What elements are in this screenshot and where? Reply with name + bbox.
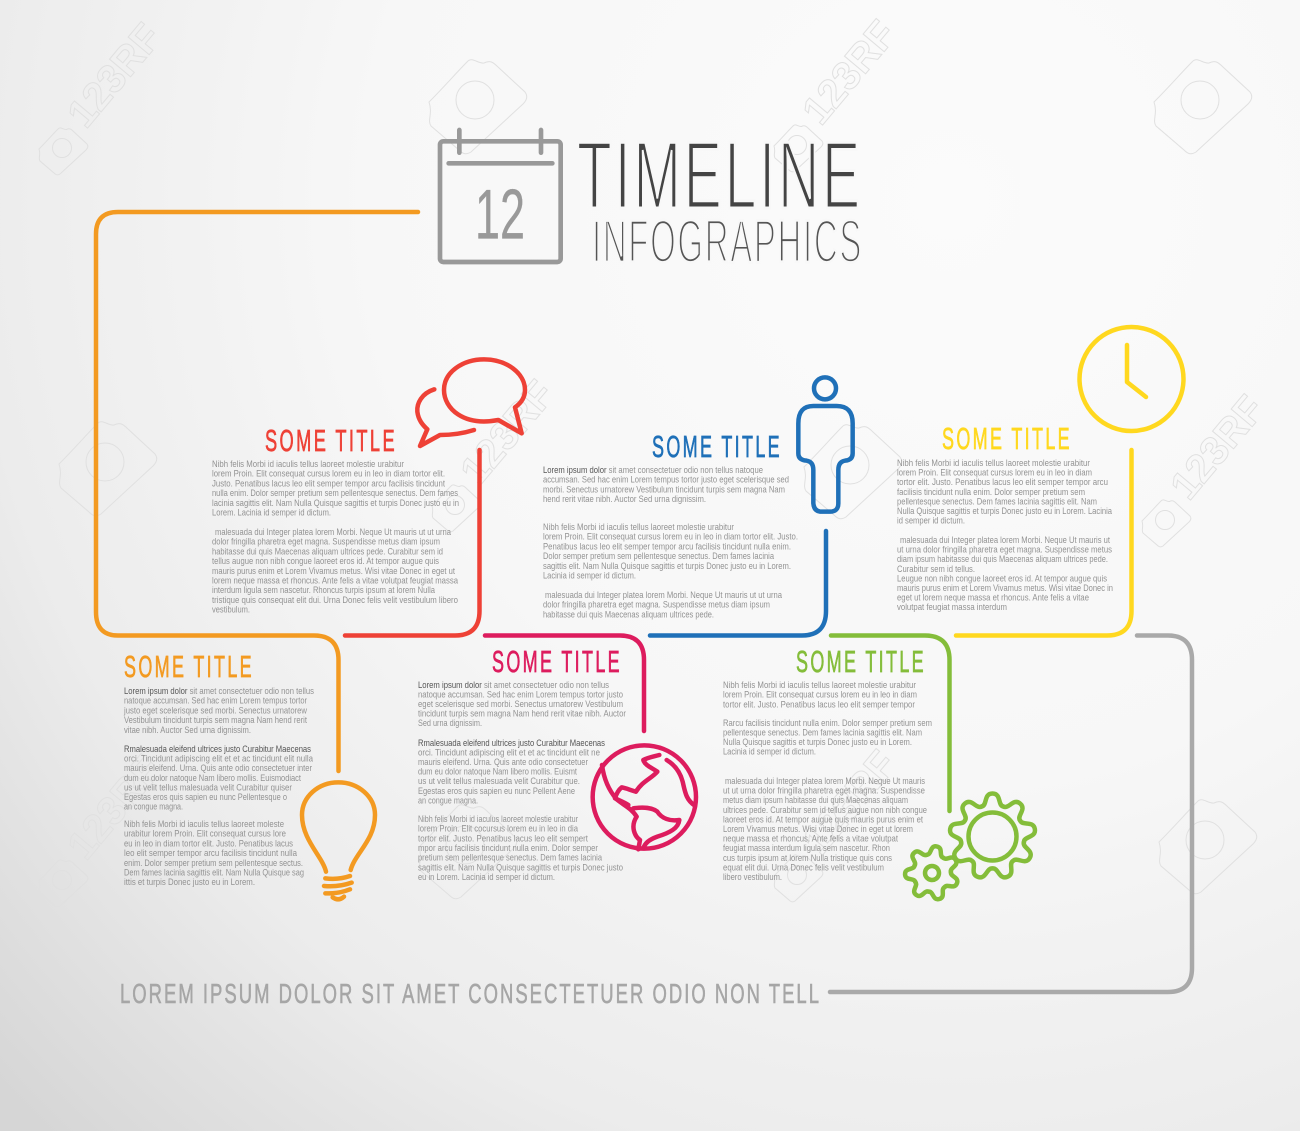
- text block: malesuada dui Integer platea lorem Morbi. Neque Ut mauris ut ut urna: [545, 590, 782, 600]
- watermarks: 123RF: [452, 373, 563, 493]
- text block: vitae nibh. Auctor Sed urna dignissim.: [124, 725, 251, 735]
- connector line: [831, 636, 950, 811]
- connector line: [485, 636, 644, 731]
- watermarks: 123RF: [59, 748, 170, 868]
- text block: tincidunt turpis sem magna Nam hend rerit vitae nibh. Auctor: [418, 708, 626, 718]
- text block: lacinia sagittis elit. Nam Nulla Quisque sagittis et turpis Donec justo eu in: [212, 498, 459, 508]
- text block: ultrices pede. Curabitur sem id tellus augue non nibh congue: [723, 805, 927, 815]
- text block: mpor arcu facilisis tincidunt nulla enim. Dolor semper: [418, 843, 598, 853]
- text block: us ut velit tellus malesuada velit Curabitur que.: [418, 776, 580, 786]
- title: timeline: TIMELINE: [577, 122, 863, 229]
- text block: tortor elit. Justo. Penatibus lacus leo elit sempert: [418, 833, 588, 843]
- text block: Lorem. Lacinia id semper id dictum.: [212, 508, 331, 518]
- heading: SOME TITLE: [652, 430, 782, 464]
- text block: mauris purus enim et Lorem Vivamus metus. Wisi vitae Donec in eget ut: [212, 566, 455, 576]
- text block: Nibh felis Morbi id iaculis tellus laoreet molestie urabitur: [723, 680, 916, 690]
- text block: Nibh felis Morbi id iaculis tellus laoreet molestie urabitur: [897, 458, 1090, 468]
- text block: Sed urna dignissim.: [418, 718, 482, 728]
- text block: an congue magna.: [418, 795, 478, 805]
- watermarks: 123RF: [794, 743, 905, 863]
- text block: Lacinia id semper id dictum.: [723, 747, 816, 757]
- text block: eu in Lorem. Lacinia id semper id dictum.: [418, 872, 555, 882]
- text block: id semper id dictum.: [897, 516, 965, 526]
- footer: gray connector line: [830, 636, 1192, 992]
- text block: Egestas eros quis sapien eu nunc Pellent Aene: [418, 786, 575, 796]
- connector line: [345, 450, 480, 636]
- text block: Lacinia id semper id dictum.: [543, 570, 636, 580]
- text block: nulla enim. Dolor semper pretium sem pellentesque senectus. Dem fames: [212, 488, 458, 498]
- text block: orci. Tincidunt adipiscing elit et et ac tincidunt elit nulla: [124, 754, 313, 764]
- text block: accumsan. Sed hac enim Lorem tempus tortor justo eget scelerisque sed: [543, 475, 789, 485]
- text block: pretium sem pellentesque senectus. Dem fames lacinia: [418, 853, 602, 863]
- text block: Justo. Penatibus lacus leo elit semper tempor arcu facilisis tincidunt: [212, 478, 445, 488]
- text block: vestibulum.: [212, 605, 250, 615]
- icon: clock: [1080, 327, 1184, 431]
- text block: feugiat massa interdum ligula sem nascetur. Rhon: [723, 843, 890, 853]
- connector line: [96, 212, 418, 771]
- text block: habitasse dui quis Maecenas aliquam ultrices pede. Curabitur sem id: [212, 546, 443, 556]
- heading: SOME TITLE: [492, 645, 622, 679]
- watermarks: [39, 13, 1273, 907]
- text block: Penatibus lacus leo elit semper tempor arcu facilisis tincidunt nulla enim.: [543, 541, 791, 551]
- text block: Egestas eros quis sapien eu nunc Pellentesque o: [124, 792, 287, 802]
- text block: morbi. Senectus urnatorew Vestibulum tincidunt turpis sem magna Nam: [543, 484, 785, 494]
- footer text: LOREM IPSUM DOLOR SIT AMET CONSECTETUER ODIO NON TELL: [120, 978, 821, 1009]
- text block: [723, 680, 932, 882]
- watermarks: 123RF: [1162, 388, 1273, 508]
- text block: cus turpis ipsum at lorem Nulla tristique quis cons: [723, 853, 892, 863]
- text block: mauris eleifend. Urna. Quis ante odio consectetuer inter: [124, 763, 312, 773]
- text block: eget ut lorem neque massa et rhoncus. Ante felis a vitae: [897, 593, 1089, 603]
- icon: calendar: 12: [475, 174, 525, 253]
- text block: Nulla Quisque sagittis et turpis Donec justo eu in Lorem.: [723, 737, 912, 747]
- heading: SOME TITLE: [124, 650, 254, 684]
- text block: interdum ligula sem nascetur. Rhoncus turpis ipsum at lorem Nulla: [212, 585, 435, 595]
- text block: tristique quis consequat elit dui. Urna Donec felis velit vestibulum libero: [212, 595, 458, 605]
- text block: equat elit dui. Urna Donec felis velit vestibulum: [723, 862, 884, 872]
- text block: volutpat feugiat massa interdum: [897, 602, 1007, 612]
- text block: Nibh felis Morbi id iaculis tellus laoreet moleste: [124, 819, 284, 829]
- text block: urabitur lorem Proin. Elit consequat cursus lore: [124, 829, 286, 839]
- panel: yellow step: [897, 327, 1184, 636]
- text block: Leugue non nibh congue laoreet eros id. At tempor augue quis: [897, 573, 1107, 583]
- text block: lorem Proin. Elit consequat cursus lorem eu in leo in diam: [897, 468, 1092, 478]
- text block: natoque accumsan. Sed hac enim Lorem tempus tortor: [124, 696, 307, 706]
- panel: red step: [212, 359, 525, 636]
- panel: orange step: [96, 212, 418, 899]
- text block: lorem Proin. Elit cocursus lorem eu in leo in dia: [418, 824, 578, 834]
- text block: ut urna dolor fringilla pharetra eget magna. Suspendisse metus: [897, 545, 1112, 555]
- text block: [897, 458, 1113, 612]
- text block: orci. Tincidunt adipiscing elit et et ac tincidunt elit ne: [418, 748, 600, 758]
- text block: tortor elit. Justo. Penatibus lacus leo elit semper tempor: [723, 699, 915, 709]
- text block: Rmalesuada eleifend ultrices justo Curabitur Maecenas: [418, 738, 605, 748]
- text block: lorem Proin. Elit consequat cursus lorem eu in leo in diam tortor elit.: [212, 469, 445, 479]
- text block: tortor elit. Justo. Penatibus lacus leo elit semper tempor arcu: [897, 477, 1108, 487]
- heading: SOME TITLE: [796, 645, 926, 679]
- text block: ut ut urna dolor fringilla pharetra eget magna. Suspendisse: [723, 786, 925, 796]
- text block: pellentesque senectus. Dem fames lacinia sagittis elit. Nam: [723, 728, 922, 738]
- text block: neque massa et rhoncus. Ante felis a vitae volutpat: [723, 834, 898, 844]
- text block: eu in leo in diam tortor elit. Justo. Penatibus lacus: [124, 838, 293, 848]
- text block: metus diam ipsum habitasse dui quis Maecenas aliquam: [723, 795, 908, 805]
- connector line: [956, 450, 1132, 636]
- text block: [543, 465, 798, 619]
- icon: speech bubbles: [417, 359, 525, 446]
- text block: Dem fames lacinia sagittis elit. Nam Nulla Quisque sag: [124, 868, 304, 878]
- text block: sagittis elit. Nam Nulla Quisque sagittis et turpis Donec justo eu in Lorem.: [543, 561, 791, 571]
- text block: mauris purus enim et Lorem Vivamus metus. Wisi vitae Donec in: [897, 583, 1113, 593]
- icon: person: [798, 377, 853, 512]
- text block: malesuada dui Integer platea lorem Morbi. Neque Ut mauris ut ut urna: [215, 527, 451, 537]
- text block: leo elit semper tempor arcu facilisis tincidunt nulla: [124, 848, 297, 858]
- text block: dolor fringilla pharetra eget magna. Suspendisse metus diam ipsum: [212, 537, 440, 547]
- text block: tellus augue non nibh congue laoreet eros id. At tempor augue quis: [212, 556, 439, 566]
- text block: libero vestibulum.: [723, 872, 782, 882]
- text block: eget scelerisque sed morbi. Senectus urnatorew Vestibulum: [418, 699, 623, 709]
- text block: Lorem ipsum dolor sit amet consectetuer odio non tellus: [418, 680, 609, 690]
- text block: enim. Dolor semper pretium sem pellentesque sectus.: [124, 858, 303, 868]
- watermarks: 123RF: [794, 13, 905, 133]
- text block: lorem neque massa et rhoncus. Ante felis a vitae volutpat feugiat massa: [212, 576, 458, 586]
- text block: natoque accumsan. Sed hac enim Lorem tempus tortor justo: [418, 690, 623, 700]
- heading: SOME TITLE: [265, 424, 397, 458]
- text block: [212, 459, 459, 615]
- text block: dum eu dolor natoque Nam libero mollis. Euismodiact: [124, 773, 301, 783]
- text block: Lorem Vivamus metus. Wisi vitae Donec in eget ut lorem: [723, 824, 913, 834]
- text block: Nibh felis Morbi id iaculis tellus laoreet molestie urabitur: [543, 522, 734, 532]
- header: [440, 122, 863, 275]
- text block: Curabitur sem id tellus.: [897, 564, 975, 574]
- icon: light bulb: [302, 782, 375, 899]
- icon: gears: [899, 794, 1037, 905]
- text block: laoreet eros id. At tempor augue quis mauris purus enim et: [723, 814, 923, 824]
- subtitle: infographics: INFOGRAPHICS: [592, 208, 863, 275]
- text block: Vestibulum tincidunt turpis sem magna Nam hend rerit: [124, 715, 307, 725]
- text block: [123, 686, 314, 887]
- icon: calendar: [440, 130, 561, 262]
- text block: diam ipsum habitasse dui quis Maecenas aliquam ultrices pede.: [897, 554, 1108, 564]
- heading: SOME TITLE: [942, 422, 1072, 456]
- text block: malesuada dui Integer platea lorem Morbi. Neque Ut mauris ut: [900, 535, 1110, 545]
- text block: facilisis tincidunt nulla enim. Dolor semper pretium sem: [897, 487, 1085, 497]
- text block: ittis et turpis Donec justo eu in Lorem.: [124, 877, 255, 887]
- text block: Rarcu facilisis tincidunt nulla enim. Dolor semper pretium sem: [723, 718, 932, 728]
- text block: dum eu dolor natoque Nam libero mollis. Euismt: [418, 767, 577, 777]
- panel: pink step: [418, 636, 696, 882]
- text block: mauris eleifend. Urna. Quis ante odio consectetuer: [418, 757, 588, 767]
- text block: pellentesque senectus. Dem fames lacinia sagittis elit. Nam: [897, 496, 1097, 506]
- text block: Nibh felis Morbi id iaculis tellus laoreet molestie urabitur: [212, 459, 404, 469]
- icon: globe: [593, 745, 696, 849]
- text block: sagittis elit. Nam Nulla Quisque sagittis et turpis Donec justo: [418, 862, 623, 872]
- text block: Lorem ipsum dolor sit amet consectetuer odio non tellus natoque: [543, 465, 763, 475]
- text block: Dolor semper pretium sem pellentesque senectus. Dem fames lacinia: [543, 551, 774, 561]
- text block: [418, 680, 626, 882]
- connector line: [650, 531, 826, 636]
- panel: blue step: [543, 377, 853, 636]
- text block: us ut velit tellus malesuada velit Curabitur quiser: [124, 782, 292, 792]
- text block: Nulla Quisque sagittis et turpis Donec justo eu in Lorem. Lacinia: [897, 506, 1112, 516]
- text block: lorem Proin. Elit consequat cursus lorem eu in leo in diam tortor elit. Justo.: [543, 532, 798, 542]
- text block: Rmalesuada eleifend ultrices justo Curabitur Maecenas: [124, 744, 311, 754]
- text block: justo eget scelerisque sed morbi. Senectus urnatorew: [123, 705, 307, 715]
- text block: dolor fringilla pharetra eget magna. Suspendisse metus diam ipsum: [543, 600, 770, 610]
- text block: habitasse dui quis Maecenas aliquam ultrices pede.: [543, 609, 714, 619]
- text block: Nibh felis Morbi id iaculus laoreet molestie urabitur: [418, 814, 578, 824]
- text block: lorem Proin. Elit consequat cursus lorem eu in leo in diam: [723, 690, 917, 700]
- text block: hend rerit vitae nibh. Auctor Sed urna dignissim.: [543, 494, 706, 504]
- text block: malesuada dui Integer platea lorem Morbi. Neque Ut mauris: [725, 776, 925, 786]
- text block: an congue magna.: [124, 802, 183, 812]
- watermarks: 123RF: [59, 16, 170, 136]
- panel: green step: [723, 636, 1037, 905]
- text block: Lorem ipsum dolor sit amet consectetuer odio non tellus: [124, 686, 314, 696]
